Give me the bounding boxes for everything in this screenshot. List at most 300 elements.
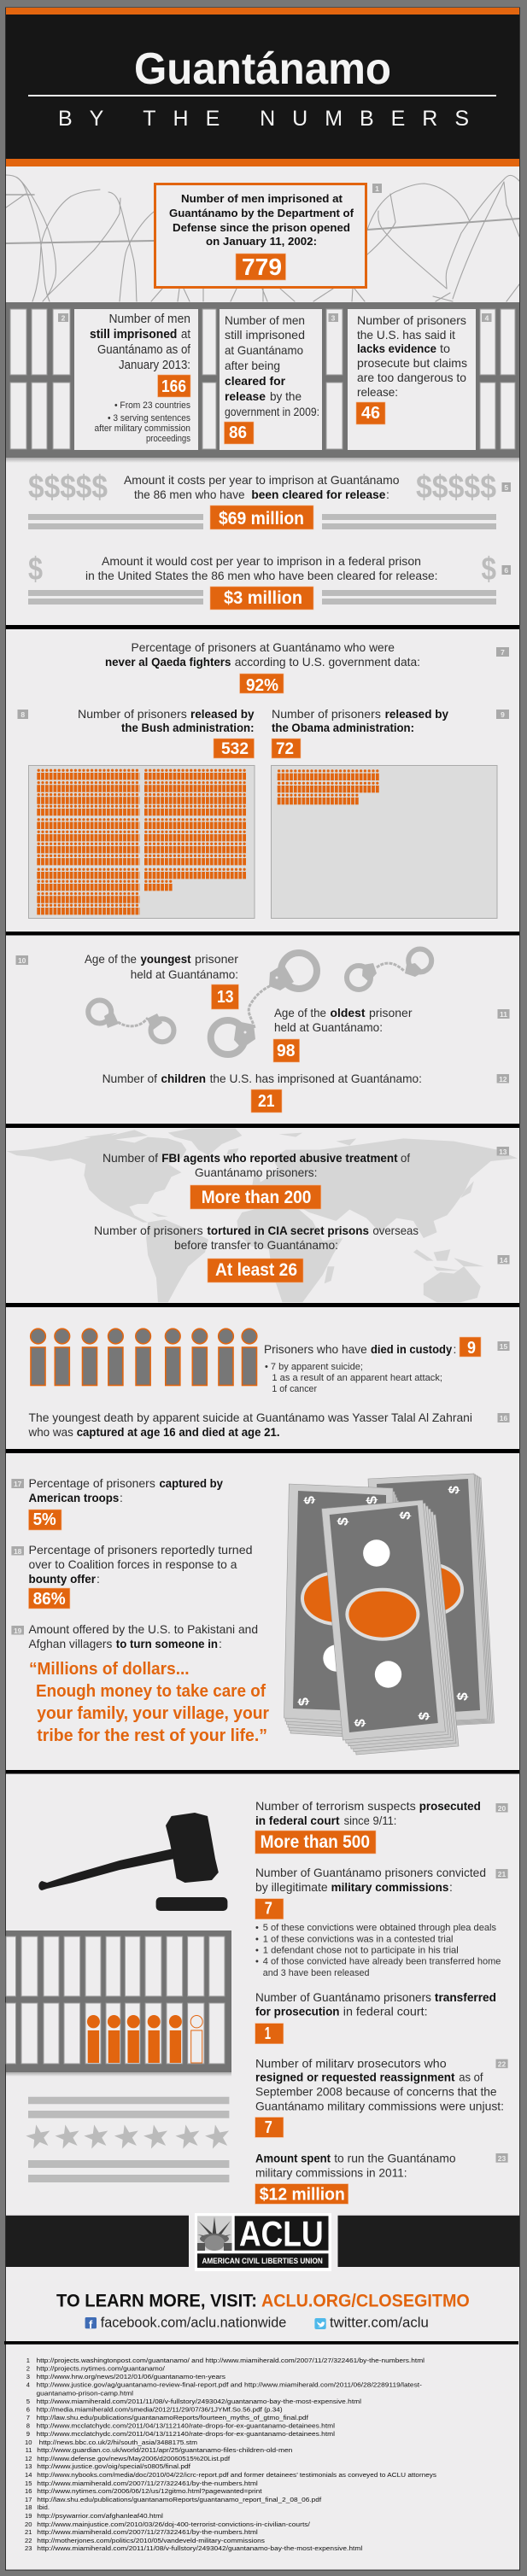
- text: amount spent: to run the Guantánamo: [334, 2151, 456, 2164]
- source tag 7: [496, 647, 509, 657]
- text: prosecuted in federal court: Number of terrorism suspects: [255, 1799, 416, 1813]
- text: Guantanamo cost: :: [386, 488, 389, 501]
- source list: http://www.miamiherald.com/2011/11/08/v-fullstory/2493042/guantanamo-bay-the-most-expensive.html: [37, 2544, 363, 2552]
- text: bounty offer: [29, 1543, 253, 1586]
- back left bill: $: [364, 1495, 380, 1505]
- text: died in custody: 1 as a result of an apparent heart attack;: [272, 1373, 442, 1383]
- source list: http://projects.nytimes.com/guantanamo/: [36, 2364, 166, 2372]
- source tag 3: 3: [331, 314, 336, 323]
- text: amount spent: [255, 2151, 456, 2179]
- source list: 15: [25, 2480, 32, 2487]
- panel: cleared for release: cleared for: [225, 374, 286, 388]
- text: FBI agents: of: [401, 1151, 410, 1165]
- text: youngest death: [28, 1411, 472, 1439]
- source list: http://www.miamiherald.com/2007/11/27/322461/by-the-numbers.html: [37, 2480, 258, 2487]
- quote: [29, 1660, 269, 1745]
- list: conviction details: 1 defendant chose not to participate in his trial: [263, 1945, 459, 1955]
- text: prosecuted in federal court: since 9/11:: [344, 1814, 396, 1827]
- stat: 92%: [240, 674, 284, 695]
- source tag 9: [496, 710, 509, 719]
- source list: 3: [26, 2373, 30, 2380]
- text: Guantanamo cost: [124, 473, 400, 501]
- source tag 14: 14: [500, 1256, 507, 1265]
- stat: 1: 1: [265, 2024, 271, 2043]
- list: conviction details: and 3 have been released: [263, 1968, 369, 1978]
- source list: [25, 2357, 436, 2552]
- source list: 18: [25, 2503, 32, 2511]
- source tag 2: 2: [61, 314, 66, 323]
- icon: flag stripes and stars: [24, 2097, 232, 2182]
- source tag 12: 12: [499, 1075, 507, 1084]
- stat: 166: 166: [161, 377, 186, 396]
- text: military commissions: Number of Guantánamo prisoners convicted: [255, 1866, 486, 1879]
- source tag 23: 23: [498, 2154, 506, 2163]
- stat: 532: [214, 739, 255, 758]
- panel: still imprisoned: • 3 serving sentences: [108, 413, 190, 423]
- text: Guantanamo cost: Amount it costs per year to imprison at Guantánamo: [124, 473, 400, 487]
- source tag 13: 13: [499, 1148, 507, 1156]
- source list: 10: [25, 2439, 32, 2446]
- source tag 4: [482, 313, 492, 323]
- stat: 98: [273, 1039, 300, 1062]
- world map background: [7, 1129, 518, 1302]
- text: Bush releases: Number of prisoners: [78, 707, 187, 721]
- text: transferred for prosecution: for prosecution: [255, 2005, 340, 2018]
- text: bounty offer: :: [97, 1572, 100, 1586]
- source list: http://motherjones.com/politics/2010/05/vandeveld-military-commissions: [37, 2537, 265, 2544]
- list: conviction details: •: [255, 1957, 259, 1967]
- text: bounty offer: over to Coalition forces in response to a: [29, 1557, 237, 1571]
- stat: More than 500: More than 500: [261, 1832, 370, 1852]
- source list: http://www.guardian.co.uk/world/2011/apr/25/guantanamo-files-children-old-men: [37, 2446, 292, 2454]
- text: Obama releases: [272, 707, 448, 734]
- stat: 7 prosecutors: [255, 2117, 284, 2137]
- source tag 12: [497, 1074, 509, 1084]
- source list: http://psywarrior.com/afghanleaf40.html: [37, 2512, 163, 2520]
- text: prosecuted in federal court: in federal court: [255, 1814, 340, 1827]
- stat: 1: [255, 2024, 284, 2044]
- text: Bush releases: [78, 707, 255, 734]
- stat: $3 million: $3 million: [224, 588, 302, 608]
- text: CIA secret prisons: before transfer to Guantánamo:: [174, 1238, 338, 1252]
- panel: lacks evidence: are too dangerous to: [357, 371, 466, 384]
- text: military commissions: :: [449, 1880, 453, 1894]
- text: died in custody: died in custody: [371, 1342, 452, 1356]
- panel: cleared for release: at Guantánamo: [225, 343, 303, 357]
- text: FBI agents: FBI agents who reported abusive treatment: [161, 1151, 398, 1165]
- source tag 16: [497, 1413, 509, 1422]
- stat: 7 convictions: 7: [265, 1900, 272, 1919]
- source list: 6: [26, 2405, 30, 2413]
- stat: 72: [272, 739, 301, 758]
- back left bill: $: [296, 1697, 312, 1707]
- stat: 98: 98: [277, 1042, 296, 1060]
- source list: 23: [25, 2544, 32, 2552]
- text: never al Qaeda: [105, 640, 420, 669]
- source list: 4: [26, 2380, 30, 2388]
- panel: still imprisoned: Guantánamo as of: [97, 342, 191, 357]
- panel: men imprisoned callout: Guantánamo by the Department of: [169, 207, 354, 219]
- divider: [6, 932, 519, 936]
- text: offered to villagers: Afghan villagers: [29, 1637, 112, 1650]
- source list: 9: [26, 2430, 30, 2438]
- panel: lacks evidence: lacks evidence: [357, 342, 436, 355]
- text: Obama releases: Number of prisoners: [272, 707, 381, 721]
- panel: still imprisoned: proceedings: [146, 434, 190, 444]
- list: conviction details: •: [255, 1934, 259, 1944]
- front bill: $: [416, 1711, 432, 1721]
- icon: stack of dollar bills: [284, 1474, 495, 1755]
- source list: 19: [25, 2512, 32, 2520]
- icon: nine prisoners who died: [31, 1329, 257, 1385]
- title: Guantánamo: [134, 44, 391, 94]
- panel: cleared for release: [220, 309, 322, 450]
- stat: 86: [224, 422, 254, 444]
- source tag 20: [495, 1803, 508, 1813]
- source list: guantanamo-prison-camp.html: [36, 2389, 133, 2397]
- text: Bush releases: the Bush administration:: [121, 721, 255, 734]
- source list: http://www.mcclatchydc.com/2011/04/13/112140/rate-drops-for-ex-guantanamo-detainees.html: [36, 2430, 335, 2438]
- text: federal prison cost: [85, 554, 437, 582]
- divider: [6, 1449, 519, 1453]
- text: prosecutors resigned: September 2008 because of concerns that the: [255, 2085, 497, 2099]
- text: federal prison cost: in the United States the 86 men who have been cleared for release:: [85, 569, 437, 582]
- text: captured by troops: :: [120, 1491, 123, 1504]
- text: youngest prisoner: held at Guantánamo:: [131, 967, 238, 981]
- source list: Ibid.: [37, 2503, 50, 2511]
- panel: still imprisoned: at: [181, 327, 191, 342]
- front bill: $: [352, 1718, 368, 1728]
- panel: men imprisoned callout: Number of men imprisoned at: [181, 192, 343, 205]
- panel: lacks evidence: prosecute but claims: [357, 356, 467, 370]
- stat: $3 million: [28, 587, 496, 610]
- text: oldest prisoner: [274, 1006, 413, 1034]
- stat: 86%: 86%: [33, 1590, 66, 1609]
- stat: 7 convictions: [255, 1899, 284, 1919]
- text: prosecutors resigned: Guantánamo military commissions were unjust:: [255, 2100, 504, 2113]
- quote: tribe for the rest of your life.”: [37, 1726, 267, 1745]
- chart: Obama administration people: [272, 765, 497, 919]
- source list: 16: [25, 2487, 32, 2495]
- text: military commissions: by illegitimate: [255, 1880, 328, 1894]
- text: captured by troops: [29, 1476, 223, 1504]
- stat: 532: 532: [221, 740, 249, 758]
- stat: 13: 13: [217, 988, 234, 1007]
- source tag 23: [495, 2153, 508, 2163]
- ACLU logo: ACLU: [239, 2214, 324, 2254]
- stat: $69 million: $69 million: [219, 509, 304, 529]
- source list: 12: [25, 2455, 32, 2462]
- source tag 6: 6: [504, 566, 508, 575]
- panel: cleared for release: government in 2009:: [225, 405, 319, 418]
- source tag 22: [495, 2059, 508, 2068]
- facebook link: facebook.com/aclu.nationwide: [101, 2315, 286, 2331]
- text: captured by troops: captured by: [159, 1476, 223, 1490]
- source list: 14: [25, 2471, 32, 2479]
- divider: [6, 1124, 519, 1128]
- back right bill: $: [446, 1485, 462, 1495]
- source tag 7: 7: [501, 648, 505, 657]
- panel: cleared for release: by the: [270, 389, 302, 403]
- source list: 1: [26, 2357, 30, 2364]
- stat: At least 26: At least 26: [215, 1260, 297, 1280]
- ACLU logo: AMERICAN CIVIL LIBERTIES UNION: [202, 2257, 323, 2265]
- text: youngest prisoner: Age of the: [85, 952, 137, 966]
- source list: http://news.bbc.co.uk/2/hi/south_asia/3488175.stm: [39, 2439, 197, 2446]
- source list: http://www.hrw.org/news/2012/01/06/guantanamo-ten-years: [36, 2373, 225, 2380]
- icon: facebook: [85, 2317, 97, 2331]
- divider: [6, 1770, 519, 1774]
- source list: http://www.miamiherald.com/2011/11/08/v-fullstory/2493042/guantanamo-bay-the-most-expensive.html: [36, 2398, 361, 2405]
- text: amount spent: Amount spent: [255, 2151, 331, 2164]
- ACLU logo: [195, 2213, 331, 2271]
- text: captured by troops: American troops: [29, 1491, 120, 1504]
- text: youngest death: who was: [28, 1425, 73, 1439]
- source tag 9: 9: [501, 710, 505, 719]
- stat: 779: 779: [242, 254, 282, 280]
- source tag 5: 5: [504, 483, 508, 492]
- source tag 19: [11, 1626, 24, 1635]
- text: prosecutors resigned: resigned or requested reassignment: [255, 2071, 455, 2084]
- icon: handcuffs right: [347, 949, 431, 990]
- text: oldest prisoner: held at Guantánamo:: [274, 1020, 383, 1034]
- stat: 21: [251, 1089, 282, 1113]
- chart: Bush administration people: [29, 765, 255, 919]
- text: prosecutors resigned: as of: [459, 2071, 483, 2084]
- text: transferred for prosecution: [255, 1990, 496, 2018]
- source tag 17: [11, 1479, 24, 1488]
- text: died in custody: :: [453, 1342, 456, 1356]
- stat: 46: [356, 402, 385, 424]
- text: youngest death: The youngest death by apparent suicide at Guantánamo was Yasser Talal Al Zahrani: [29, 1411, 472, 1424]
- front bill: [322, 1500, 459, 1755]
- icon: statue of liberty: [197, 2216, 232, 2251]
- source tag 17: 17: [14, 1480, 22, 1488]
- source tag 15: [497, 1341, 509, 1351]
- source tag 10: 10: [18, 956, 26, 965]
- call to action: ACLU.ORG/CLOSEGITMO: [261, 2292, 470, 2311]
- text: bounty offer: Percentage of prisoners reportedly turned: [29, 1543, 253, 1557]
- text: children: Number of: [102, 1072, 157, 1085]
- icon: handcuffs left: [88, 1001, 174, 1042]
- text: transferred for prosecution: Number of Guantánamo prisoners: [255, 1990, 431, 2004]
- front bill: $: [397, 1510, 413, 1521]
- stat: 9: [460, 1337, 481, 1358]
- source tag 22: 22: [498, 2059, 506, 2068]
- source tag 21: [495, 1869, 508, 1878]
- stat: 13: [212, 984, 238, 1009]
- source list: http://law.shu.edu/publications/guantanamoReports/fourteen_myths_of_gtmo_final.pdf: [36, 2414, 309, 2421]
- icon: handcuffs centre: [211, 953, 317, 1054]
- quote: your family, your village, your: [37, 1704, 269, 1723]
- text: children: children: [161, 1072, 206, 1085]
- text: never al Qaeda: Percentage of prisoners at Guantánamo who were: [132, 640, 395, 654]
- call to action: TO LEARN MORE, VISIT:: [56, 2292, 257, 2311]
- panel: men imprisoned callout: [155, 184, 366, 287]
- source tag 2: [58, 313, 68, 323]
- source list: 7: [26, 2414, 30, 2421]
- quote: “Millions of dollars...: [29, 1660, 190, 1679]
- stat: $12 million: $12 million: [260, 2186, 345, 2205]
- text: federal prison cost: Amount it would cost per year to imprison in a federal prison: [102, 554, 421, 568]
- icon: twitter: [314, 2318, 326, 2329]
- icon: dollar signs left: $$$$$: [28, 470, 108, 505]
- source list: http://media.miamiherald.com/smedia/2012/11/29/07/36/1JYMf.So.56.pdf (p.34): [36, 2405, 283, 2413]
- source tag 21: 21: [498, 1870, 506, 1878]
- text: Guantanamo cost: been cleared for release: [251, 488, 386, 501]
- stat: 72: 72: [276, 740, 294, 758]
- source list: http://www.defense.gov/news/May2006/d20060515%20List.pdf: [37, 2455, 231, 2462]
- icon: dollar signs right: $$$$$: [416, 470, 496, 505]
- text: children: the U.S. has imprisoned at Guantánamo:: [210, 1072, 422, 1085]
- text: prosecuted in federal court: [255, 1799, 481, 1827]
- panel: lacks evidence: the U.S. has said it: [357, 328, 455, 342]
- source list: http://www.nybooks.com/media/doc/2010/04/22/icrc-report.pdf and former detainees’ testimonials as conveyed to ACLU attorneys: [37, 2471, 436, 2479]
- source tag 11: [497, 1009, 509, 1019]
- text: prosecutors resigned: Number of military prosecutors who: [255, 2056, 447, 2070]
- text: Bush releases: released by: [190, 707, 255, 721]
- panel: still imprisoned: still imprisoned: [90, 327, 177, 342]
- source tag 18: [11, 1546, 24, 1556]
- text: CIA secret prisons: [94, 1224, 419, 1252]
- source list: 21: [25, 2528, 32, 2536]
- source list: http://www.miamiherald.com/2007/11/27/322461/by-the-numbers.html: [37, 2528, 258, 2536]
- text: oldest prisoner: prisoner: [369, 1006, 413, 1019]
- stat: 46: 46: [361, 404, 380, 423]
- text: died in custody: 1 of cancer: [272, 1384, 317, 1394]
- stat: 21: 21: [258, 1092, 275, 1111]
- text: died in custody: • 7 by apparent suicide;: [265, 1362, 363, 1372]
- stat: 5%: 5%: [33, 1510, 56, 1529]
- source list: 20: [25, 2521, 32, 2528]
- source tag 5: [502, 482, 511, 492]
- source tag 8: [17, 710, 28, 719]
- text: oldest prisoner: oldest: [330, 1006, 366, 1019]
- list: conviction details: •: [255, 1923, 259, 1933]
- back right bill: [368, 1474, 495, 1729]
- icon: jail cell: [6, 1931, 231, 2077]
- panel: lacks evidence: Number of prisoners: [357, 313, 466, 327]
- panel: still imprisoned: • From 23 countries: [114, 400, 190, 411]
- text: never al Qaeda: never al Qaeda fighters: [105, 655, 231, 669]
- stat: 92%: 92%: [246, 676, 278, 695]
- icon: five orange prisoners and one outline: [87, 2015, 202, 2063]
- panel: still imprisoned: after military commission: [94, 423, 190, 434]
- panel: still imprisoned: Number of men: [109, 312, 190, 326]
- source list: 8: [26, 2421, 30, 2429]
- source tag 3: [328, 313, 338, 323]
- source tag 6: [502, 565, 511, 575]
- text: bounty offer: bounty offer: [29, 1572, 97, 1586]
- text: FBI agents: Guantánamo prisoners:: [195, 1165, 318, 1179]
- panel: men imprisoned callout: on January 11, 2002:: [206, 235, 317, 248]
- panel: lacks evidence: release:: [357, 385, 398, 399]
- source tag 18: 18: [14, 1547, 22, 1556]
- text: Obama releases: released by: [385, 707, 448, 721]
- text: prosecutors resigned: [255, 2056, 504, 2113]
- list: conviction details: 4 of those convicted have already been transferred home: [263, 1957, 501, 1967]
- divider: [4, 2341, 518, 2345]
- list: conviction details: [255, 1923, 501, 1978]
- text: children: [102, 1072, 422, 1085]
- text: CIA secret prisons: tortured in CIA secret prisons: [207, 1224, 369, 1237]
- stat: 7 prosecutors: 7: [265, 2118, 272, 2137]
- source tag 10: [15, 955, 28, 965]
- text: youngest prisoner: prisoner: [195, 952, 238, 966]
- source list: 11: [26, 2446, 32, 2454]
- source list: http://www.justice.gov/oig/special/s0805/final.pdf: [37, 2462, 191, 2470]
- panel: men imprisoned callout: Defense since the prison opened: [173, 221, 350, 234]
- back left bill: [284, 1484, 401, 1740]
- back right bill: $: [454, 1691, 471, 1702]
- barbed wire background: [6, 175, 519, 301]
- text: offered to villagers: :: [219, 1637, 222, 1650]
- icon: dollar right: $: [482, 552, 496, 587]
- source tag 15: 15: [500, 1342, 507, 1351]
- twitter link: twitter.com/aclu: [330, 2315, 429, 2331]
- text: military commissions: military commissions: [331, 1880, 449, 1894]
- panel: cleared for release: Number of men: [225, 313, 305, 327]
- back left bill: $: [302, 1495, 318, 1505]
- text: youngest prisoner: youngest: [140, 952, 191, 966]
- subtitle: BY THE NUMBERS: [58, 107, 469, 131]
- text: died in custody: Prisoners who have: [264, 1342, 367, 1356]
- text: CIA secret prisons: Number of prisoners: [94, 1224, 203, 1237]
- call to action: [56, 2292, 470, 2311]
- source tag 1: 1: [375, 184, 379, 193]
- text: prosecuted in federal court: prosecuted: [419, 1799, 481, 1813]
- source list: 13: [25, 2462, 32, 2470]
- source list: 17: [25, 2496, 32, 2503]
- text: youngest prisoner: [85, 952, 238, 981]
- source tag 4: 4: [485, 314, 489, 323]
- text: offered to villagers: to turn someone in: [116, 1637, 218, 1650]
- icon: facebook: f: [89, 2318, 93, 2331]
- source list: http://www.mcclatchydc.com/2011/04/13/112140/rate-drops-for-ex-guantanamo-detainees.html: [36, 2421, 335, 2429]
- panel: still imprisoned: January 2013:: [119, 358, 190, 372]
- icon: dollar left: $: [28, 552, 43, 587]
- text: transferred for prosecution: transferred: [435, 1990, 496, 2004]
- source tag 14: [497, 1255, 509, 1265]
- panel: lacks evidence: to: [440, 342, 450, 355]
- source list: http://projects.washingtonpost.com/guantanamo/ and http://www.miamiherald.com/2007/11/27/322461/by-the-numbers.html: [36, 2357, 425, 2364]
- source list: 22: [25, 2537, 32, 2544]
- text: offered to villagers: Amount offered by the U.S. to Pakistani and: [29, 1622, 258, 1636]
- text: CIA secret prisons: overseas: [372, 1224, 419, 1237]
- panel: still imprisoned: [74, 309, 198, 450]
- front bill: $: [335, 1516, 351, 1527]
- source tag 20: 20: [498, 1804, 506, 1813]
- divider: [6, 1303, 519, 1307]
- source list: http://www.nytimes.com/2006/06/12/us/12gitmo.html?pagewanted=print: [37, 2487, 263, 2495]
- panel: lacks evidence: [348, 309, 476, 450]
- text: offered to villagers: [29, 1622, 258, 1650]
- stat: 5%: [29, 1510, 61, 1530]
- source tag 16: 16: [500, 1414, 507, 1422]
- text: Guantanamo cost: the 86 men who have: [134, 488, 245, 501]
- stat: 86: 86: [229, 423, 247, 442]
- stat: More than 200: More than 200: [202, 1188, 311, 1207]
- list: conviction details: •: [255, 1945, 259, 1955]
- text: never al Qaeda: according to U.S. government data:: [235, 655, 420, 669]
- list: conviction details: 5 of these convictions were obtained through plea deals: [263, 1923, 497, 1933]
- source list: 5: [26, 2398, 30, 2405]
- header banner: [6, 8, 519, 166]
- source tag 1: [372, 184, 382, 193]
- source list: 2: [26, 2364, 30, 2372]
- source list: http://law.shu.edu/publications/guantanamoReports/guantanamo_report_final_2_08_06.pdf: [37, 2496, 322, 2503]
- text: FBI agents: [102, 1151, 410, 1179]
